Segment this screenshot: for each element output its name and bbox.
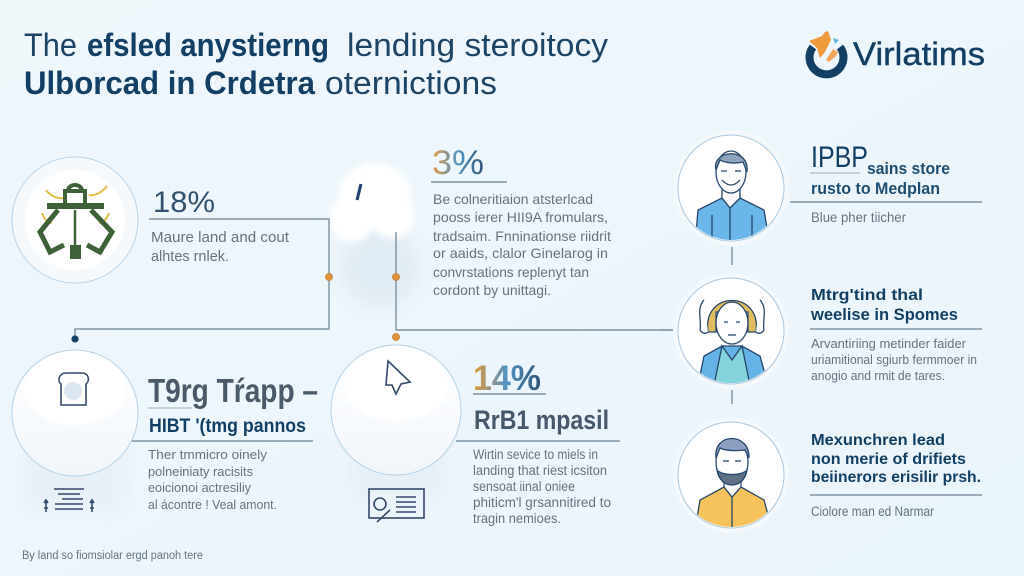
description: Maure land and cout — [151, 230, 289, 246]
title: oternictions — [325, 65, 497, 101]
icon: emblem badge — [12, 157, 138, 283]
description: landing that riest icsiton — [473, 463, 607, 478]
icon: soft white cloud shape — [330, 163, 420, 308]
description: Ther tmmicro oinely — [148, 447, 268, 462]
subheading: HIBT '(tmg pannos — [149, 416, 306, 437]
heading: beiinerors erisilir prsh. — [811, 469, 981, 486]
description — [433, 191, 611, 298]
caption: Blue pher tiicher — [811, 210, 906, 225]
logo mark — [809, 31, 843, 74]
panel: person two — [673, 273, 982, 389]
title: efsled anystierng — [87, 27, 329, 63]
description: eoicionoi actresiliy — [148, 480, 251, 495]
description — [811, 337, 977, 383]
title: The — [24, 27, 77, 63]
panel: person three — [673, 417, 982, 533]
description — [148, 447, 277, 512]
heading — [810, 287, 958, 324]
description: or aaids, clalor Ginelarog in — [433, 245, 608, 261]
title: lending steroitocy — [347, 27, 608, 63]
stat value: 18% — [153, 186, 215, 219]
description: Wirtin sevice to miels in — [473, 447, 598, 462]
description — [473, 447, 611, 526]
title — [24, 27, 608, 101]
stat value: 14% — [473, 359, 541, 398]
panel: person one: rusto to Medplan — [811, 180, 940, 198]
description: pooss ierer HII9A fromulars, — [433, 209, 608, 225]
description — [151, 230, 289, 265]
description: alhtes rnlek. — [151, 249, 229, 265]
stat value: 3% — [432, 144, 484, 182]
avatar: man in blue shirt — [678, 134, 784, 242]
heading: weelise in Spomes — [810, 305, 958, 324]
panel: 3% stat — [330, 144, 611, 308]
heading — [811, 432, 981, 486]
heading: non merie of drifiets — [811, 451, 966, 468]
description: al ácontre ! Veal amont. — [148, 497, 277, 512]
heading: T9rg Tŕapp – — [148, 372, 318, 409]
logo wordmark: Virlatims — [853, 36, 985, 72]
logo — [809, 31, 985, 74]
description: anogio and rmit de tares. — [811, 369, 945, 383]
avatar: woman with headphones — [673, 273, 789, 389]
description: Arvantiriing metinder faider — [811, 337, 966, 351]
heading: Mexunchren lead — [811, 432, 945, 449]
description: convrstations replenyt tan — [433, 264, 589, 280]
panel: person one: sains store — [867, 160, 950, 178]
description: uriamitional sgiurb fermmoer in — [811, 353, 977, 367]
icon: id card — [369, 489, 424, 522]
icon: cylinder with arrow cursor — [331, 345, 461, 500]
description: cordont by unittagi. — [433, 282, 551, 298]
avatar: bearded man in yellow shirt — [673, 417, 789, 533]
description: tradsaim. Fnninationse riidrit — [433, 228, 611, 244]
description: polneiniaty racisits — [148, 464, 253, 479]
description: phiticm'l grsannitired to — [473, 495, 611, 510]
panel: trap — [12, 350, 318, 512]
heading: Mtrg'tind thal — [811, 287, 923, 304]
title: Ulborcad in Crdetra — [24, 65, 315, 101]
description: sensoat iinal oniee — [473, 479, 575, 494]
heading: IPBP — [811, 141, 868, 174]
icon: small equaliser — [44, 489, 94, 512]
heading: RrB1 mpasil — [474, 405, 609, 435]
description: Be colneritiaion atsterlcad — [433, 191, 593, 207]
connector lines — [71, 219, 732, 404]
caption: Ciolore man ed Narmar — [811, 504, 934, 519]
panel: person one — [673, 130, 982, 246]
icon: cylinder with toast — [12, 350, 138, 510]
panel: 14% stat — [331, 345, 620, 526]
panel: 18% stat — [12, 157, 289, 283]
footer note: By land so fiomsiolar ergd panoh tere — [22, 550, 203, 562]
description: tragin nemioes. — [473, 511, 561, 526]
